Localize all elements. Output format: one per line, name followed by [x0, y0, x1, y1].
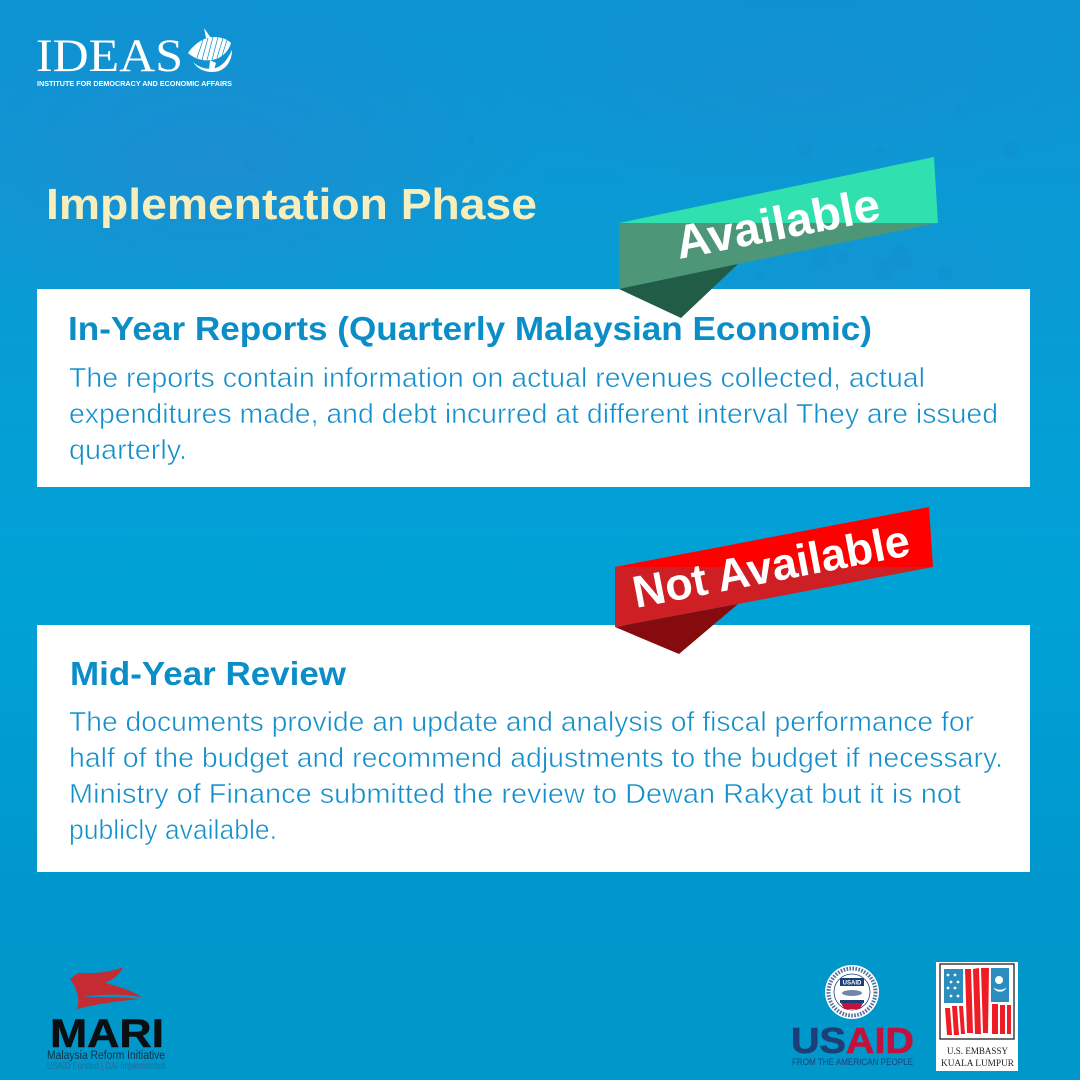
- text: mid-year description: [69, 706, 1003, 845]
- USAID wordmark: USAID: [791, 1020, 914, 1061]
- text: in-year description: expenditures made, and debt incurred at different interval They are issued: [69, 398, 998, 429]
- USAID tagline: FROM THE AMERICAN PEOPLE: [792, 1057, 913, 1067]
- ribbon: not available: [615, 507, 933, 654]
- embassy name: U.S. EMBASSY: [947, 1047, 1008, 1057]
- text: mid-year description: publicly available.: [69, 814, 277, 845]
- logo: U.S. Embassy Kuala Lumpur: [936, 962, 1018, 1071]
- icon: MARI bird: [70, 967, 142, 1009]
- text: mid-year description: half of the budget and recommend adjustments to the budget if necessary.: [69, 742, 1003, 773]
- text: in-year description: The reports contain information on actual revenues collected, actual: [69, 362, 925, 393]
- ribbon label: available: Available: [671, 177, 884, 269]
- MARI wordmark: MARI: [50, 1012, 164, 1056]
- MARI tagline: USAID Funded | DAI Implemented: [47, 1061, 165, 1072]
- MARI subtitle: Malaysia Reform Initiative: [47, 1050, 165, 1062]
- text: mid-year description: Ministry of Finance submitted the review to Dewan Rakyat but it is not: [69, 778, 961, 809]
- heading: in-year reports: In-Year Reports (Quarterly Malaysian Economic): [68, 310, 872, 347]
- text: mid-year description: The documents provide an update and analysis of fiscal performance for: [69, 706, 974, 737]
- logo emblem: [188, 28, 232, 72]
- logo: USAID: [791, 965, 914, 1067]
- panel: in-year reports: [37, 289, 1030, 487]
- ribbon label: not available: Not Available: [628, 515, 914, 618]
- panel: mid-year review: [37, 625, 1030, 872]
- icon: USAID seal: USAID: [843, 980, 862, 986]
- title: Implementation Phase: [46, 180, 537, 229]
- text: in-year description: quarterly.: [69, 434, 187, 465]
- logo: MARI: [47, 967, 165, 1072]
- logo wordmark: IDEAS: [36, 30, 183, 82]
- heading: mid-year review: Mid-Year Review: [70, 655, 346, 692]
- logo: IDEAS: [36, 28, 232, 88]
- logo: U.S. Embassy Kuala Lumpur: KUALA LUMPUR: [941, 1059, 1015, 1069]
- ribbon: available: [619, 157, 938, 318]
- icon: flag: [940, 964, 1014, 1039]
- logo tagline: INSTITUTE FOR DEMOCRACY AND ECONOMIC AFFAIRS: [37, 79, 232, 88]
- text: in-year description: [69, 362, 998, 465]
